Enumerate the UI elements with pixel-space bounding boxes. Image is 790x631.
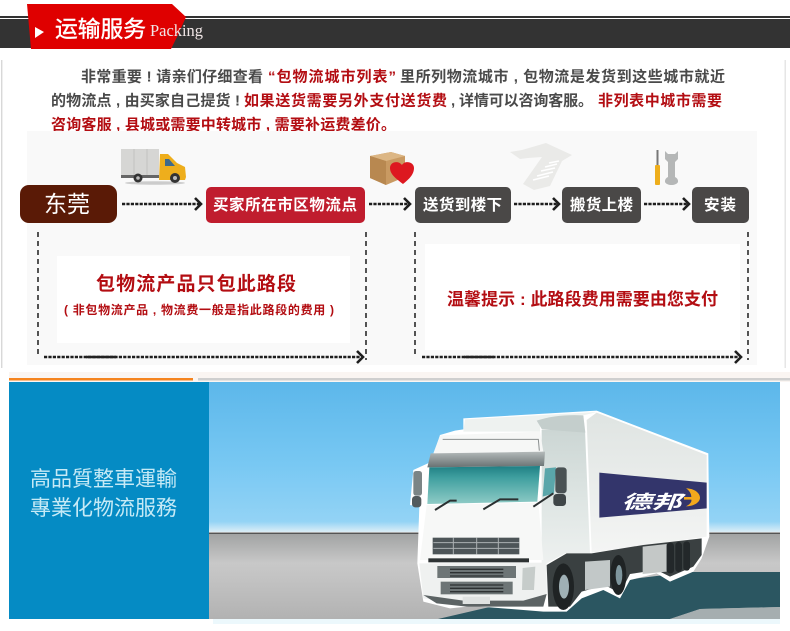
box: 搬货上楼: 搬货上楼 xyxy=(570,195,633,214)
text block: notice: “包物流城市列表” xyxy=(268,68,396,86)
box: 送货到楼下 xyxy=(415,187,511,223)
box: 安装: 安装 xyxy=(704,196,736,214)
icon: white play triangle xyxy=(35,27,44,38)
panel: side borders xyxy=(1,60,786,368)
box: 东莞: 东莞 xyxy=(44,191,90,217)
panel: process background xyxy=(27,131,757,365)
red title tag xyxy=(27,4,186,49)
box: 买家所在市区物流点: 买家所在市区物流点 xyxy=(213,195,357,214)
panel: customer pays section xyxy=(415,232,748,363)
box: 买家所在市区物流点 xyxy=(206,187,365,223)
heading: 包物流产品只包此路段 xyxy=(96,272,296,295)
title: 运输服务 xyxy=(55,17,146,42)
box: 送货到楼下: 送货到楼下 xyxy=(423,195,502,214)
divider band xyxy=(9,372,790,382)
icon: delivery truck xyxy=(121,149,186,185)
box: 东莞 xyxy=(20,185,117,223)
text block: notice: , 详情可以咨询客服。 xyxy=(451,92,593,110)
panel: blue slogan: 高品質整車運輸 xyxy=(30,468,177,491)
box: 搬货上楼 xyxy=(562,187,641,223)
box: 安装 xyxy=(692,187,749,223)
subtext: ( 非包物流产品 , 物流费一般是指此路段的费用 ) xyxy=(64,302,334,317)
panel: blue slogan: 專業化物流服務 xyxy=(30,497,177,520)
photo: truck on road: 德邦 xyxy=(621,491,687,512)
arrow 3 xyxy=(514,198,559,210)
subtitle: Packing xyxy=(150,21,203,40)
arrow 4 xyxy=(644,198,689,210)
icon: stairs xyxy=(510,143,572,190)
text block: notice: 如果送货需要另外支付送货费 xyxy=(244,92,447,110)
icon: box with heart xyxy=(370,152,414,185)
panel: free shipping section xyxy=(38,232,366,363)
text block: notice: 的物流点 , 由买家自己提货 ! xyxy=(51,92,240,110)
note: 温馨提示 : 此路段费用需要由您支付 xyxy=(447,289,718,309)
panel: blue slogan xyxy=(9,382,209,619)
icon: tools xyxy=(655,150,678,185)
text block: notice: 非常重要 ! 请亲们仔细查看 xyxy=(81,68,263,86)
text block: notice xyxy=(51,68,725,134)
text block: notice: 非列表中城市需要 xyxy=(598,92,722,110)
text block: notice: 咨询客服 , 县城或需要中转城市 , 需要补运费差价。 xyxy=(51,116,396,134)
arrow 1 xyxy=(122,198,201,210)
truck silhouette xyxy=(410,411,709,612)
header band xyxy=(0,4,790,49)
photo: truck on road xyxy=(209,382,780,624)
text block: notice: 里所列物流城市 , 包物流是发货到这些城市就近 xyxy=(400,68,725,86)
arrow 2 xyxy=(369,198,410,210)
